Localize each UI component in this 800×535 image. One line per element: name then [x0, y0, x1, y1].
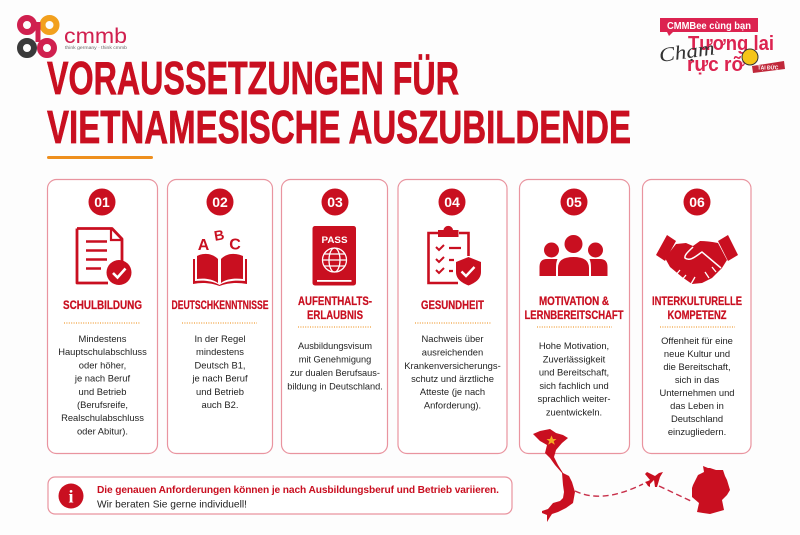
body text: auch B2. — [201, 399, 239, 410]
heading: AUFENTHALTS- — [298, 294, 372, 308]
icon: three people — [540, 235, 608, 276]
body text: (Berufsreife, — [77, 399, 128, 410]
logo: CMMBee campaign: Chạm — [658, 37, 716, 67]
number 04 — [438, 188, 466, 216]
body text: und Bereitschaft, — [539, 367, 609, 378]
arrow: flight route — [575, 484, 693, 502]
callout text: Die genauen Anforderungen können je nach Ausbildungsberuf und Betrieb variieren. — [97, 485, 499, 496]
heading: MOTIVATION & — [539, 294, 609, 308]
map: Vietnam — [533, 429, 575, 522]
star — [546, 436, 556, 445]
heading: DEUTSCHKENNTNISSE — [172, 298, 268, 312]
callout text: Wir beraten Sie gerne individuell! — [97, 500, 247, 510]
body text: sprachlich weiter- — [538, 393, 610, 404]
body text: und Betrieb — [196, 386, 244, 397]
icon: open book with ABC: C — [229, 236, 241, 254]
body text: Ausbildungsvisum — [298, 341, 372, 351]
icon: clipboard with shield — [428, 226, 481, 286]
title — [47, 52, 631, 153]
heading: SCHULBILDUNG — [63, 298, 142, 312]
body text: oder Abitur). — [77, 425, 128, 436]
icon: passport: PASS — [322, 235, 348, 246]
body text: Anforderung). — [424, 399, 481, 410]
number 02 — [206, 188, 234, 216]
heading — [298, 294, 372, 322]
heading: GESUNDHEIT — [421, 298, 485, 312]
body text: das Leben in — [670, 400, 724, 411]
body text: sich fachlich und — [539, 380, 609, 391]
logo: CMMBee campaign — [658, 18, 785, 76]
panel: 04 Gesundheit — [398, 180, 507, 454]
body text: Mindestens — [79, 333, 127, 344]
title underline — [47, 156, 153, 159]
panel: 03 Aufenthaltserlaubnis — [282, 180, 388, 454]
body text: Realschulabschluss — [61, 412, 144, 423]
panel: 05 Motivation — [520, 180, 630, 454]
heading — [652, 294, 742, 322]
map: Germany — [692, 466, 730, 514]
body text: Deutschland — [671, 413, 723, 424]
icon: info — [58, 484, 84, 508]
body text: zuentwickeln. — [546, 406, 602, 418]
number 02: 02 — [212, 194, 228, 210]
logo: cmmb: cmmb — [64, 25, 127, 48]
logo: cmmb: think germany · think cmmb — [65, 45, 128, 50]
number 01 — [88, 188, 116, 216]
body text: Hauptschulabschluss — [58, 346, 147, 357]
body text: Offenheit für eine — [661, 335, 733, 346]
number 04: 04 — [444, 194, 460, 210]
heading: ERLAUBNIS — [307, 308, 363, 322]
panel: 06 Interkulturelle Kompetenz — [642, 180, 751, 454]
body text: ausreichenden — [422, 346, 483, 358]
body text: Atteste (je nach — [420, 386, 485, 397]
body text: mit Genehmigung — [299, 354, 371, 364]
body text: je nach Beruf — [74, 373, 131, 384]
number 03: 03 — [327, 194, 343, 210]
icon: open book with ABC: B — [213, 226, 226, 244]
number 05: 05 — [566, 194, 582, 210]
heading: LERNBEREITSCHAFT — [524, 308, 624, 322]
body text: einzugliedern. — [668, 426, 726, 437]
heading — [524, 294, 624, 322]
icon: info: i — [68, 486, 74, 506]
icon: open book with ABC: A — [198, 237, 210, 254]
body text: sich in das — [675, 374, 719, 385]
body text: Unternehmen und — [659, 387, 735, 398]
heading: KOMPETENZ — [668, 308, 726, 322]
body text: die Bereitschaft, — [663, 361, 731, 372]
number 03 — [322, 188, 348, 216]
number 06: 06 — [689, 194, 705, 210]
panel: 02 Deutschkenntnisse — [168, 180, 272, 454]
body text: mindestens — [196, 346, 244, 357]
icon: airplane — [645, 472, 663, 487]
body text: oder höher, — [79, 359, 126, 370]
body text: Nachweis über — [421, 333, 484, 344]
callout: note — [48, 477, 512, 514]
number 06 — [684, 188, 710, 216]
number 05 — [560, 188, 588, 216]
body text: schutz und ärztliche — [411, 373, 494, 384]
title: VORAUSSETZUNGEN FÜR — [47, 52, 459, 104]
body text: und Betrieb — [79, 386, 126, 397]
logo: cmmb — [20, 18, 128, 55]
logo: CMMBee campaign: Tương lai — [688, 33, 774, 55]
panel: 01 Schulbildung — [48, 180, 158, 454]
body text: zur dualen Berufsaus- — [290, 368, 380, 378]
icon: document with check — [77, 228, 132, 285]
body text: Deutsch B1, — [194, 359, 246, 370]
icon: handshake — [656, 235, 738, 284]
body text: Krankenversicherungs- — [404, 360, 501, 371]
number 01: 01 — [94, 194, 110, 210]
heading: INTERKULTURELLE — [652, 294, 742, 308]
body text: bildung in Deutschland. — [287, 382, 383, 392]
icon: open book with ABC — [193, 226, 247, 286]
body text: Zuverlässigkeit — [543, 353, 606, 364]
logo: CMMBee campaign: rực rỡ — [687, 54, 746, 76]
icon: passport — [312, 226, 356, 286]
callout text — [97, 485, 499, 510]
logo: CMMBee campaign: CMMBee cùng bạn — [667, 20, 751, 32]
body text: In der Regel — [194, 333, 246, 344]
logo: CMMBee campaign: TẠI ĐỨC — [758, 64, 779, 72]
body text: neue Kultur und — [664, 348, 730, 359]
body text: je nach Beruf — [191, 373, 248, 384]
body text: Hohe Motivation, — [539, 340, 609, 351]
